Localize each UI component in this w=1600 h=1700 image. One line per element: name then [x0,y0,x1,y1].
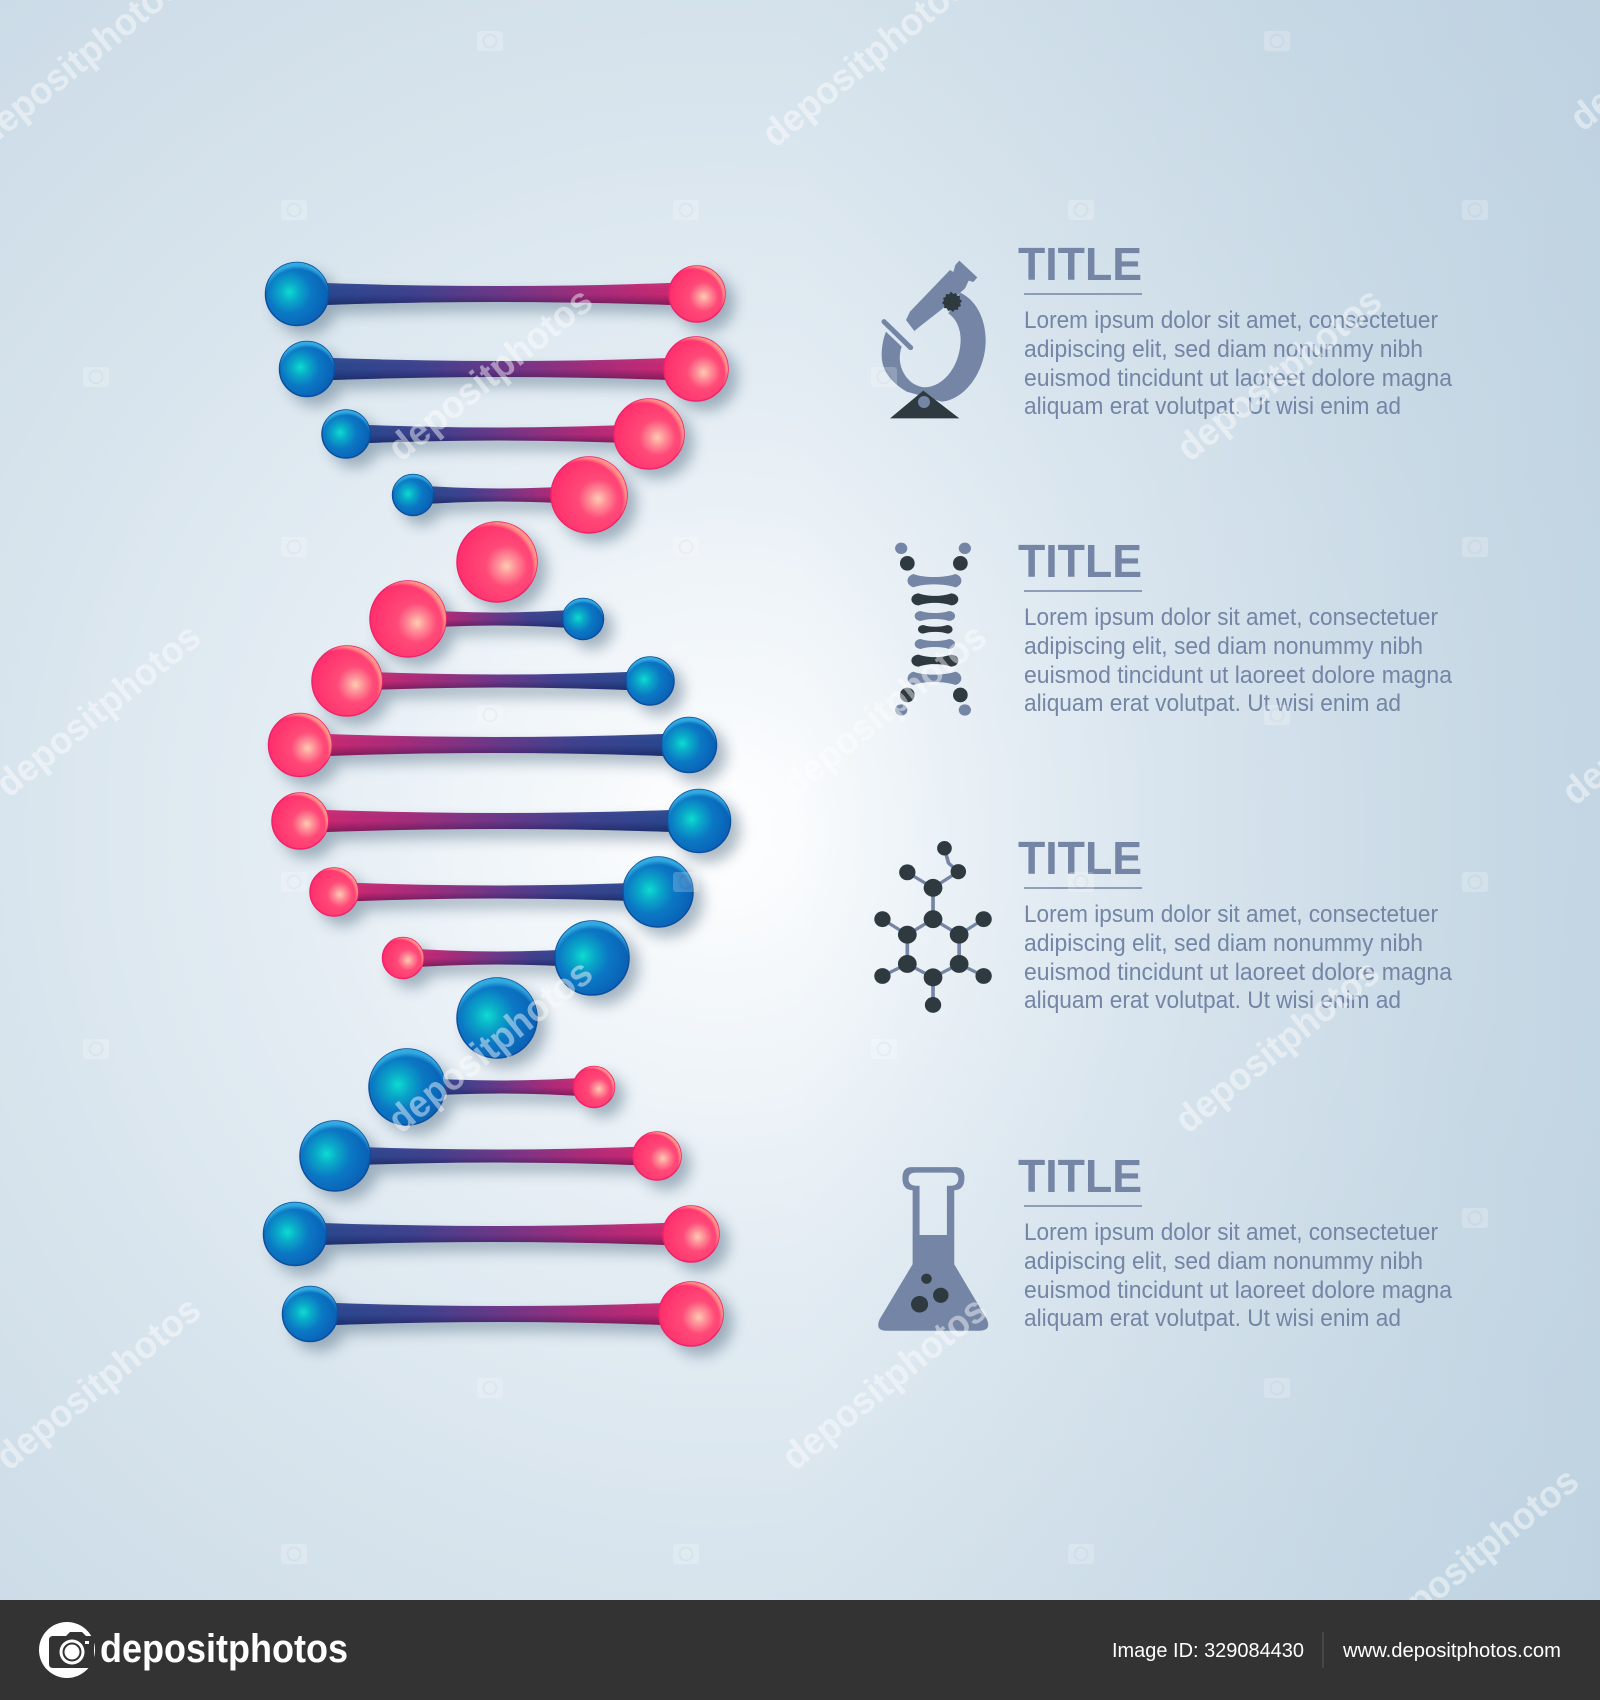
title block 4: Lorem ipsum dolor sit amet, consectetuer [1024,1219,1438,1246]
rung 16 [282,1282,723,1346]
rung 1 [266,262,725,326]
rung 15 [264,1202,719,1266]
DNA helix [264,262,730,1346]
title block 4: euismod tincidunt ut laoreet dolore magna [1024,1277,1453,1304]
title block 1 [1018,238,1453,420]
title block 3: TITLE [1018,832,1142,884]
rung 9 [272,790,730,852]
rung 6 [370,581,604,657]
title block 2 [1018,535,1453,717]
rung 13 [369,1049,614,1125]
website: www.depositphotos.com [1342,1640,1561,1662]
title block 1: Lorem ipsum dolor sit amet, consectetuer [1024,307,1438,334]
watermarks: depositphotos [1167,952,1388,1142]
rung 7 [312,646,674,716]
title block 2: euismod tincidunt ut laoreet dolore magna [1024,662,1453,689]
title block 3 [1018,832,1453,1014]
icon: microscope [882,261,986,418]
image id: Image ID: 329084430 [1112,1640,1304,1662]
watermarks: depositphotos [380,952,601,1142]
title block 1: euismod tincidunt ut laoreet dolore magna [1024,365,1453,392]
title block 3: aliquam erat volutpat. Ut wisi enim ad [1024,987,1401,1014]
icon: dna [895,543,971,716]
title block 4: TITLE [1018,1150,1142,1202]
icon: flask [878,1167,988,1331]
rung 14 [300,1121,681,1191]
rung 8 [268,714,716,776]
title block 2: aliquam erat volutpat. Ut wisi enim ad [1024,690,1401,717]
title block 3: adipiscing elit, sed diam nonummy nibh [1024,930,1423,957]
rung 4 [392,457,627,533]
watermarks: depositphotos [1169,280,1390,470]
rung 3 [322,399,684,469]
title block 1: adipiscing elit, sed diam nonummy nibh [1024,336,1423,363]
rung 11 [382,921,629,995]
title block 3: Lorem ipsum dolor sit amet, consectetuer [1024,901,1438,928]
footer logo icon [39,1622,95,1678]
title block 2: adipiscing elit, sed diam nonummy nibh [1024,633,1423,660]
title block 2: Lorem ipsum dolor sit amet, consectetuer [1024,604,1438,631]
title block 3: euismod tincidunt ut laoreet dolore magna [1024,959,1453,986]
watermarks: depositphotos [380,280,601,470]
title block 4: aliquam erat volutpat. Ut wisi enim ad [1024,1305,1401,1332]
title block 1: TITLE [1018,238,1142,290]
rung 10 [310,857,693,927]
icon: molecule [874,841,992,1013]
rung 5: single pink ball [457,522,537,602]
title block 2: TITLE [1018,535,1142,587]
watermarks: depositphotos [774,1289,995,1479]
footer band [0,1600,1600,1700]
rung 2 [280,337,728,401]
title block 1: aliquam erat volutpat. Ut wisi enim ad [1024,393,1401,420]
rung 12: single blue ball [457,978,537,1058]
watermarks: depositphotos [1366,1460,1587,1650]
title block 4 [1018,1150,1453,1332]
watermarks: depositphotos [774,616,995,806]
title block 4: adipiscing elit, sed diam nonummy nibh [1024,1248,1423,1275]
footer logo wordmark: depositphotos [100,1627,348,1671]
